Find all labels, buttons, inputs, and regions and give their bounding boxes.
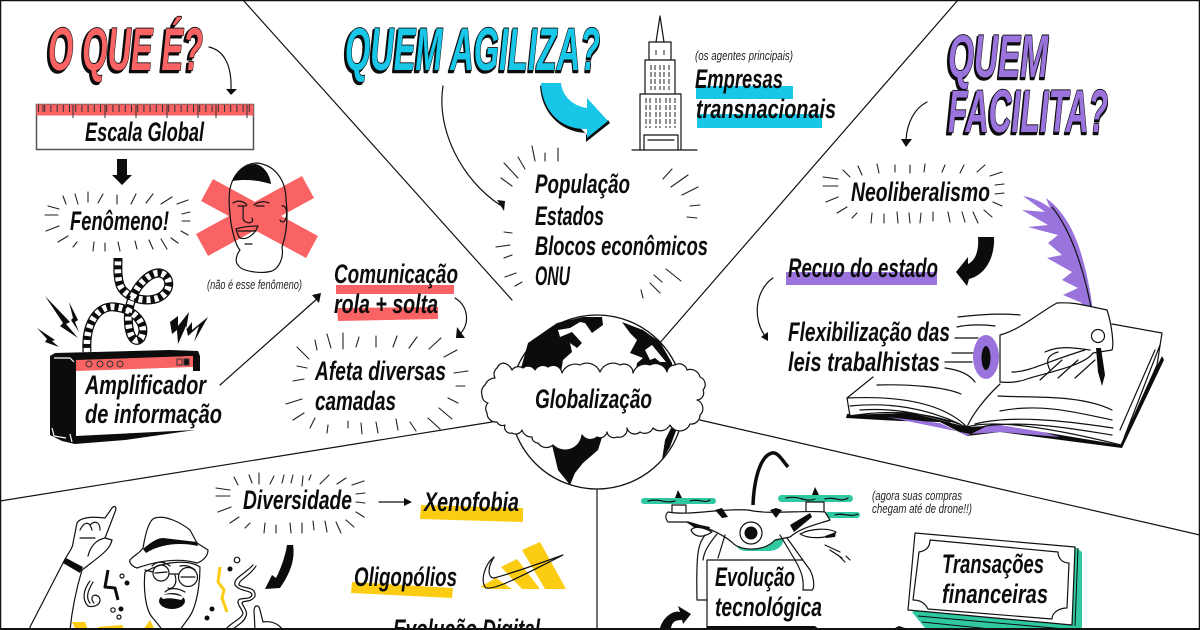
- label: amplificador de informação: [84, 370, 222, 429]
- arrow: blue curved: [540, 83, 610, 142]
- burst: Fenômeno: Fenômeno!: [70, 206, 169, 236]
- arrow: thin curved to população: [442, 86, 505, 211]
- text: recuo do estado: Recuo do estado: [788, 253, 938, 283]
- burst: Diversidade: [216, 473, 365, 533]
- text: Oligopólios: Oligopólios: [354, 562, 457, 592]
- title: Quem agiliza?: [343, 16, 600, 85]
- icon: sports logos: [480, 542, 566, 589]
- caption: os agentes principais: (os agentes principais): [695, 48, 793, 63]
- burst: Afeta diversas camadas: Afeta diversas: [314, 356, 446, 386]
- burst: agentes list: Estados: [535, 201, 604, 231]
- label: amplificador de informação: Amplificador: [84, 370, 207, 400]
- icon: delivery drone: [641, 453, 860, 630]
- title: O que é?: O QUE É?: [48, 16, 203, 83]
- burst: Fenômeno: [45, 192, 190, 251]
- burst: agentes list: Blocos econômicos: [535, 231, 708, 261]
- text: comunicação rola + solta: [334, 259, 458, 321]
- text: comunicação rola + solta: rola + solta: [334, 289, 438, 319]
- label: transações financeiras: [942, 549, 1048, 609]
- text: Xenofobia: [420, 487, 523, 522]
- icon: amplifier: [50, 350, 222, 444]
- text: Oligopólios: [351, 562, 457, 598]
- ruler: Escala Global: [36, 104, 254, 150]
- text: recuo do estado: [786, 253, 938, 285]
- title: Quem facilita?: [946, 23, 1108, 147]
- text: flexibilização: leis trabalhistas: [788, 347, 940, 377]
- arrow: facilita to neoliberalismo: [901, 102, 927, 147]
- title: Quem facilita?: QUEM: [948, 23, 1049, 90]
- arrow: amplifier to comunicação: [220, 293, 321, 385]
- burst: agentes list: População: [535, 169, 630, 199]
- caption: agora suas compras: chegam até de drone!!): [872, 501, 972, 516]
- icon: striped cable: [87, 258, 169, 352]
- text: flexibilização: Flexibilização das: [788, 317, 950, 347]
- text: flexibilização: [788, 317, 950, 377]
- arrow: small tip bottom: [895, 626, 905, 628]
- label: transações financeiras: financeiras: [942, 579, 1048, 609]
- burst: agentes list: ONU: [535, 261, 571, 291]
- arrow: curved black bottom: [660, 606, 691, 628]
- text: empresas transnacionais: transnacionais: [696, 94, 836, 124]
- arrow: title to ruler: [209, 47, 237, 95]
- burst: Afeta diversas camadas: [286, 333, 468, 434]
- icon: crossed-out face: [202, 163, 312, 272]
- title: O que é?: O QUE É?: [46, 18, 201, 85]
- burst: Afeta diversas camadas: camadas: [315, 386, 396, 416]
- text: comunicação rola + solta: Comunicação: [334, 259, 458, 289]
- arrow: diversidade to man: [265, 545, 294, 589]
- burst: Neoliberalismo: Neoliberalismo: [851, 177, 990, 207]
- text: empresas transnacionais: Empresas: [695, 64, 783, 94]
- caption: agora suas compras: [872, 488, 972, 516]
- arrow: neoliberalismo to recuo: [956, 237, 994, 286]
- label: evolução tecnológica box: tecnológica: [715, 592, 822, 622]
- title: Quem facilita?: QUEM: [946, 25, 1049, 92]
- burst: Neoliberalismo: [823, 164, 1004, 223]
- title: Quem agiliza?: QUEM AGILIZA?: [345, 16, 600, 83]
- arrow: down to fenomeno: [112, 159, 132, 185]
- label: evolução tecnológica box: [707, 560, 825, 630]
- label: evolução tecnológica box: Evolução: [715, 562, 795, 592]
- arrow: curved to afeta: [455, 298, 467, 338]
- icon: lightning bolts: [37, 296, 208, 347]
- cloud: Globalização: [482, 363, 705, 450]
- title: Quem agiliza?: QUEM AGILIZA?: [343, 18, 600, 85]
- burst: Diversidade: Diversidade: [243, 485, 352, 515]
- text: empresas transnacionais: [695, 64, 836, 128]
- icon: globe: [510, 315, 684, 489]
- text: Xenofobia: Xenofobia: [423, 487, 519, 517]
- arrow: recuo to flexibilização: [757, 278, 773, 341]
- caption: agora suas compras: (agora suas compras: [872, 488, 962, 503]
- icon: open book: [846, 314, 1164, 448]
- label: transações financeiras: Transações: [942, 549, 1044, 579]
- title: O que é?: [46, 16, 203, 85]
- icon: skyscraper: [632, 16, 697, 150]
- label: Globalização: Globalização: [535, 384, 652, 414]
- icon: banknote stack: [908, 533, 1082, 630]
- label: amplificador de informação: de informação: [85, 399, 222, 429]
- caption: não é esse fenômeno: (não é esse fenômeno): [207, 277, 302, 292]
- burst: agentes list: [496, 146, 708, 298]
- icon: man with hat: [30, 506, 283, 630]
- ruler: Escala Global: Escala Global: [85, 117, 204, 147]
- icon: hand with quill: [973, 196, 1113, 386]
- arrow: diversidade to xenofobia: [379, 498, 412, 506]
